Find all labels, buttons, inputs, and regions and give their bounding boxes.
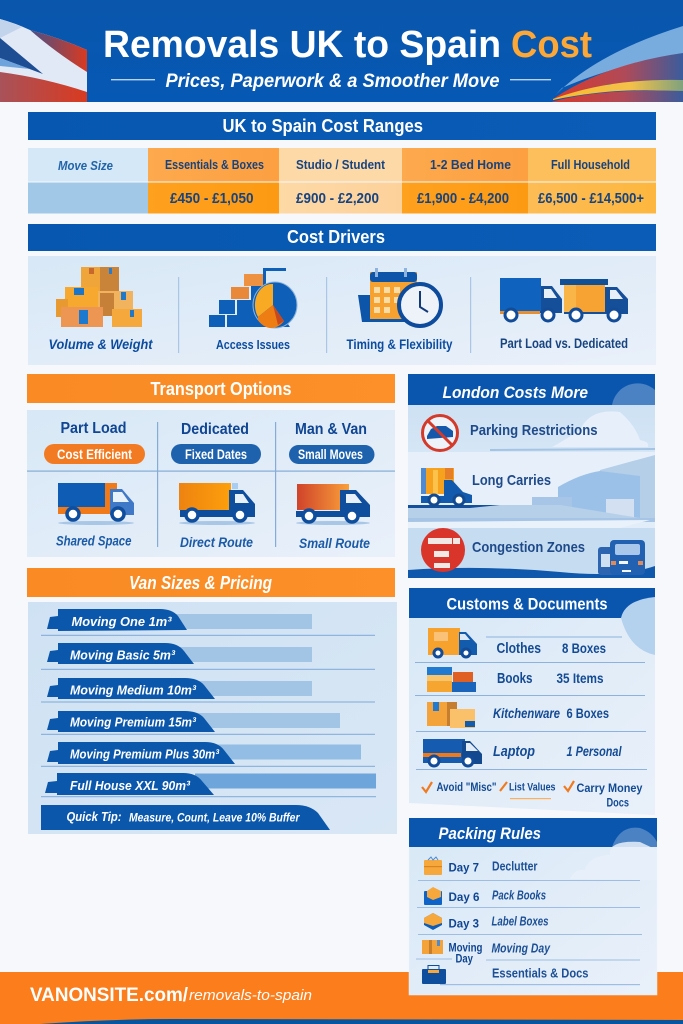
part load column: Shared Space	[56, 534, 132, 548]
row: day 3: Day 3	[448, 916, 479, 930]
icon: two trucks	[500, 278, 628, 321]
footer url path: removals-to-spain	[189, 987, 312, 1004]
row: day 3: Label Boxes	[492, 914, 549, 928]
row: parking restrictions	[422, 416, 598, 450]
row: kitchenware: 6 Boxes	[566, 705, 609, 721]
quick tip: Measure, Count, Leave 10% Buffer	[129, 810, 301, 824]
row: kitchenware	[427, 702, 609, 728]
row: day 7	[424, 857, 538, 875]
heading: London Costs More	[442, 383, 588, 402]
row: clothes	[428, 628, 606, 657]
icon: stairs and pie	[209, 268, 297, 328]
full household: Full Household	[551, 157, 630, 172]
row: clothes: 8 Boxes	[562, 640, 606, 656]
row: moving premium plus: Moving Premium Plus 30m³	[70, 746, 220, 762]
row: moving day: Day	[456, 954, 473, 966]
row: congestion zones: Congestion Zones	[472, 539, 585, 556]
label: access: Access Issues	[216, 337, 290, 352]
row: moving premium plus	[47, 742, 361, 764]
checklist: List Values	[509, 782, 556, 794]
row: moving premium: Moving Premium 15m³	[70, 714, 197, 730]
row: moving day: Moving Day	[492, 942, 551, 956]
checklist: Carry Money	[576, 781, 643, 795]
row: essentials and docs: Essentials & Docs	[492, 966, 588, 980]
row: books: Books	[497, 671, 532, 687]
row: moving premium	[47, 711, 340, 732]
UK flag ribbon	[0, 19, 87, 102]
row: day 6: Pack Books	[492, 888, 546, 902]
row: day 7: Day 7	[448, 860, 479, 874]
row: books: 35 Items	[556, 670, 604, 686]
quick tip	[41, 805, 330, 830]
panel: london costs more	[408, 374, 655, 578]
row: full house xxl: Full House XXL 90m³	[70, 778, 191, 793]
icon: boxes	[56, 267, 142, 327]
heading: cost drivers: Cost Drivers	[287, 227, 385, 247]
subtitle: Prices, Paperwork & a Smoother Move	[166, 71, 500, 92]
1-2 bed: 1-2 Bed Home	[430, 157, 511, 172]
panel: customs and documents	[409, 588, 655, 815]
header banner	[0, 0, 683, 102]
dedicated column: Dedicated	[181, 421, 249, 438]
full household	[538, 157, 644, 207]
row: long carries: Long Carries	[472, 472, 551, 489]
truck	[58, 483, 134, 525]
part load column	[44, 420, 145, 548]
panel: transport options	[27, 410, 395, 557]
dedicated column: Direct Route	[180, 535, 253, 550]
title: Cost	[511, 24, 592, 66]
icon: truck rear	[598, 540, 645, 575]
dedicated column: Fixed Dates	[185, 447, 247, 462]
label: part load vs dedicated: Part Load vs. Dedicated	[500, 336, 628, 351]
heading: van sizes	[27, 568, 395, 597]
man and van column	[289, 421, 374, 551]
row: essentials and docs	[422, 966, 588, 984]
row: long carries	[421, 468, 551, 505]
man and van column: Man & Van	[295, 421, 367, 438]
heading: cost ranges: UK to Spain Cost Ranges	[222, 116, 423, 136]
heading: transport options	[27, 374, 395, 403]
full household: £6,500 - £14,500+	[538, 190, 644, 207]
row: laptop: 1 Personal	[566, 743, 622, 759]
row: moving one	[47, 609, 312, 631]
truck	[179, 483, 255, 525]
row: moving one: Moving One 1m³	[72, 614, 172, 629]
heading: Packing Rules	[438, 824, 541, 843]
panel: cost drivers	[28, 256, 656, 365]
row: laptop	[423, 739, 622, 766]
quick tip: Quick Tip:	[66, 810, 122, 824]
heading: transport options: Transport Options	[150, 379, 292, 399]
1-2 bed: £1,900 - £4,200	[417, 190, 509, 207]
row: moving day: Moving	[448, 942, 482, 954]
title: Removals UK to Spain	[103, 24, 501, 66]
studio: £900 - £2,200	[296, 190, 379, 207]
checklist: Avoid "Misc"	[436, 782, 496, 794]
checklist: Docs	[606, 796, 629, 810]
footer url: VANONSITE.com/	[30, 985, 189, 1006]
checklist	[422, 781, 643, 810]
row: day 3	[424, 913, 549, 930]
row: moving basic	[47, 643, 312, 664]
row: books	[427, 667, 604, 692]
panel: packing rules	[409, 818, 657, 995]
part load column: Cost Efficient	[57, 447, 132, 462]
heading: van sizes: Van Sizes & Pricing	[129, 573, 272, 593]
row: moving basic: Moving Basic 5m³	[70, 648, 176, 662]
row: day 6	[424, 887, 546, 905]
essentials: £450 - £1,050	[170, 190, 254, 207]
panel: van sizes	[28, 602, 397, 834]
row: day 6: Day 6	[448, 890, 480, 904]
studio: Studio / Student	[296, 157, 386, 172]
1-2 bed	[417, 157, 511, 207]
row: laptop: Laptop	[493, 743, 535, 760]
row: moving medium	[47, 678, 312, 699]
label: volume: Volume & Weight	[48, 336, 154, 352]
cost range table	[28, 148, 656, 214]
label: timing: Timing & Flexibility	[346, 336, 453, 352]
studio	[296, 157, 386, 207]
dedicated column	[171, 421, 261, 550]
row: moving day	[422, 940, 551, 966]
footer band	[0, 972, 683, 1024]
essentials	[165, 157, 264, 207]
man and van column: Small Moves	[298, 447, 363, 462]
row: clothes: Clothes	[496, 641, 541, 657]
truck	[296, 484, 370, 525]
icon: calendar and clock	[358, 268, 441, 326]
heading: cost drivers	[28, 224, 656, 251]
row: kitchenware: Kitchenware	[493, 705, 560, 721]
background scenery	[408, 411, 655, 578]
row: congestion zones	[421, 528, 645, 575]
row: parking restrictions: Parking Restrictions	[470, 422, 598, 439]
heading: cost ranges	[28, 112, 656, 140]
move size label: Move Size	[58, 159, 113, 173]
heading: Customs & Documents	[446, 594, 608, 614]
Spain flag ribbon	[549, 26, 683, 102]
essentials: Essentials & Boxes	[165, 157, 264, 172]
man and van column: Small Route	[299, 536, 370, 551]
part load column: Part Load	[60, 420, 126, 437]
row: moving medium: Moving Medium 10m³	[70, 682, 197, 698]
row: day 7: Declutter	[492, 860, 538, 874]
row: full house xxl	[45, 773, 376, 795]
